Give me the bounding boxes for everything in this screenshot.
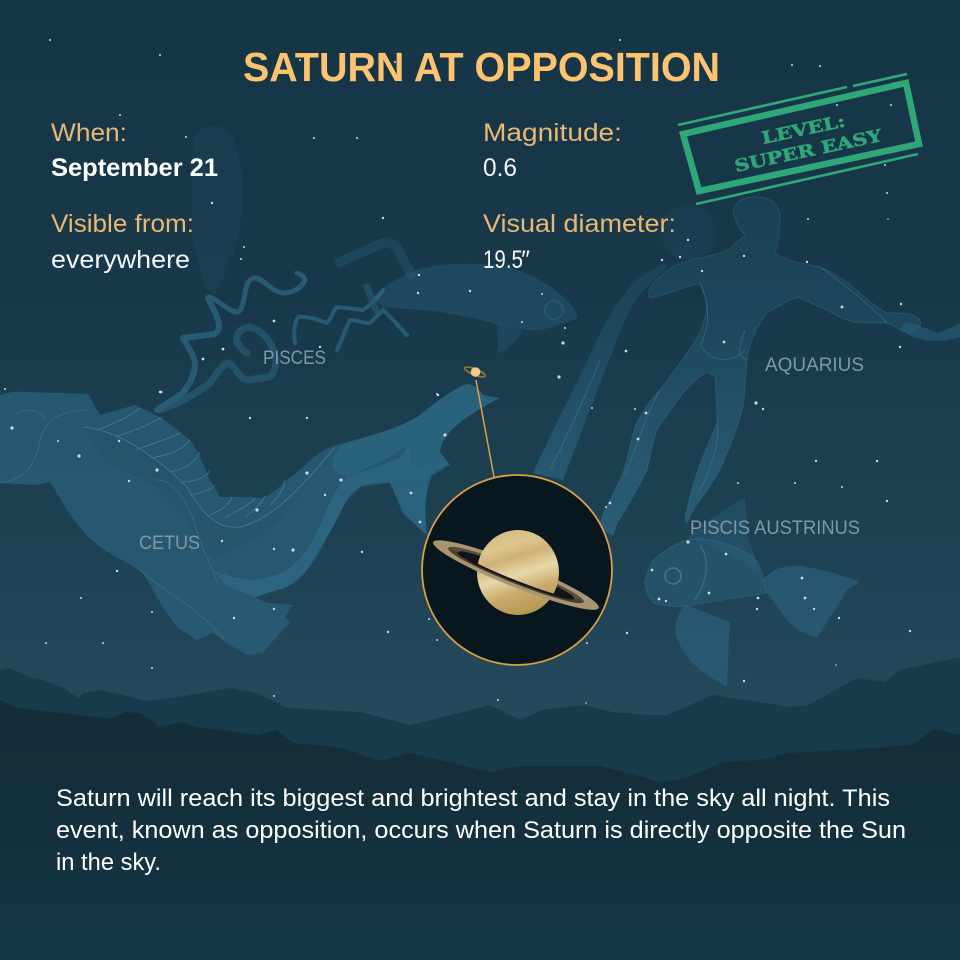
Piscis Austrinus gill line <box>695 545 706 600</box>
stamp text first line: LEVEL: <box>760 112 847 149</box>
constellation: Aquarius <box>533 197 960 535</box>
Pisces ribbons <box>157 242 411 410</box>
constellation labels <box>139 348 864 554</box>
Piscis Austrinus eye <box>665 568 681 584</box>
label: Piscis Austrinus: PISCIS AUSTRINUS <box>690 518 860 539</box>
visual diameter arcsecond mark: ″ <box>520 246 530 274</box>
description line 3: in the sky. <box>56 849 161 876</box>
Cetus tail upper medium band <box>332 384 500 477</box>
description paragraph <box>56 785 906 876</box>
Aquarius water jar <box>661 205 715 259</box>
Cetus fins and ribs <box>0 408 335 640</box>
Pisces fish fin <box>497 323 522 353</box>
info: when <box>51 119 218 182</box>
ring full ellipses behind planet <box>429 531 603 619</box>
magnitude value: 0.6 <box>483 154 517 182</box>
info: visual diameter <box>483 210 676 274</box>
near mountain ridge and ground <box>0 700 960 960</box>
label: Aquarius: AQUARIUS <box>765 355 864 376</box>
stamp: level super easy <box>678 74 919 204</box>
Pisces vertical fish <box>192 126 242 293</box>
Cetus inner darker body area <box>83 427 300 560</box>
when value: September 21 <box>51 154 218 182</box>
label: Pisces: PISCES <box>263 348 326 369</box>
constellation: Piscis Austrinus <box>645 498 860 687</box>
Aquarius right-hand stream <box>900 322 960 341</box>
dark disc <box>422 475 612 665</box>
planet globe <box>477 530 559 615</box>
label: Cetus: CETUS <box>139 533 200 554</box>
Piscis Austrinus dorsal fin <box>687 498 760 573</box>
stamp top lines <box>678 74 907 125</box>
far mountain ridge <box>0 657 960 960</box>
Pisces fish eye <box>545 301 563 319</box>
title: SATURN AT OPPOSITION <box>243 44 720 90</box>
Pisces horizontal fish <box>373 264 577 330</box>
visual diameter value: 19.5 <box>483 246 523 274</box>
Aquarius body <box>600 197 921 535</box>
description line 1: Saturn will reach its biggest and brightest and stay in the sky all night. This <box>56 785 890 812</box>
Piscis Austrinus ventral fin <box>675 605 730 687</box>
Cetus bright lower band <box>213 445 448 597</box>
constellation: Pisces <box>157 126 577 410</box>
pointer line from Saturn marker to magnified view <box>476 380 494 477</box>
ring front half <box>429 542 599 619</box>
Aquarius outline details <box>550 267 887 495</box>
visible from label: Visible from: <box>51 210 194 238</box>
Piscis Austrinus tail <box>763 566 860 638</box>
info: visible from <box>51 210 194 274</box>
stamp frame <box>683 83 919 191</box>
Aquarius water stream <box>533 263 667 480</box>
constellation: Cetus <box>0 384 500 655</box>
icon: small Saturn marker <box>464 365 486 379</box>
Cetus tail flap <box>390 476 432 535</box>
Piscis Austrinus body <box>645 539 767 606</box>
stamp bottom line <box>696 154 918 204</box>
when label: When: <box>51 119 127 147</box>
magnified Saturn view <box>422 475 612 665</box>
stamp text second line: SUPER EASY <box>733 126 885 177</box>
info: magnitude <box>483 119 622 182</box>
visual diameter label: Visual diameter: <box>483 210 676 238</box>
description line 2: event, known as opposition, occurs when Saturn is directly opposite the Sun <box>56 817 906 844</box>
star field <box>4 39 911 704</box>
Cetus body <box>0 384 500 655</box>
magnitude label: Magnitude: <box>483 119 622 147</box>
visible from value: everywhere <box>51 246 190 274</box>
